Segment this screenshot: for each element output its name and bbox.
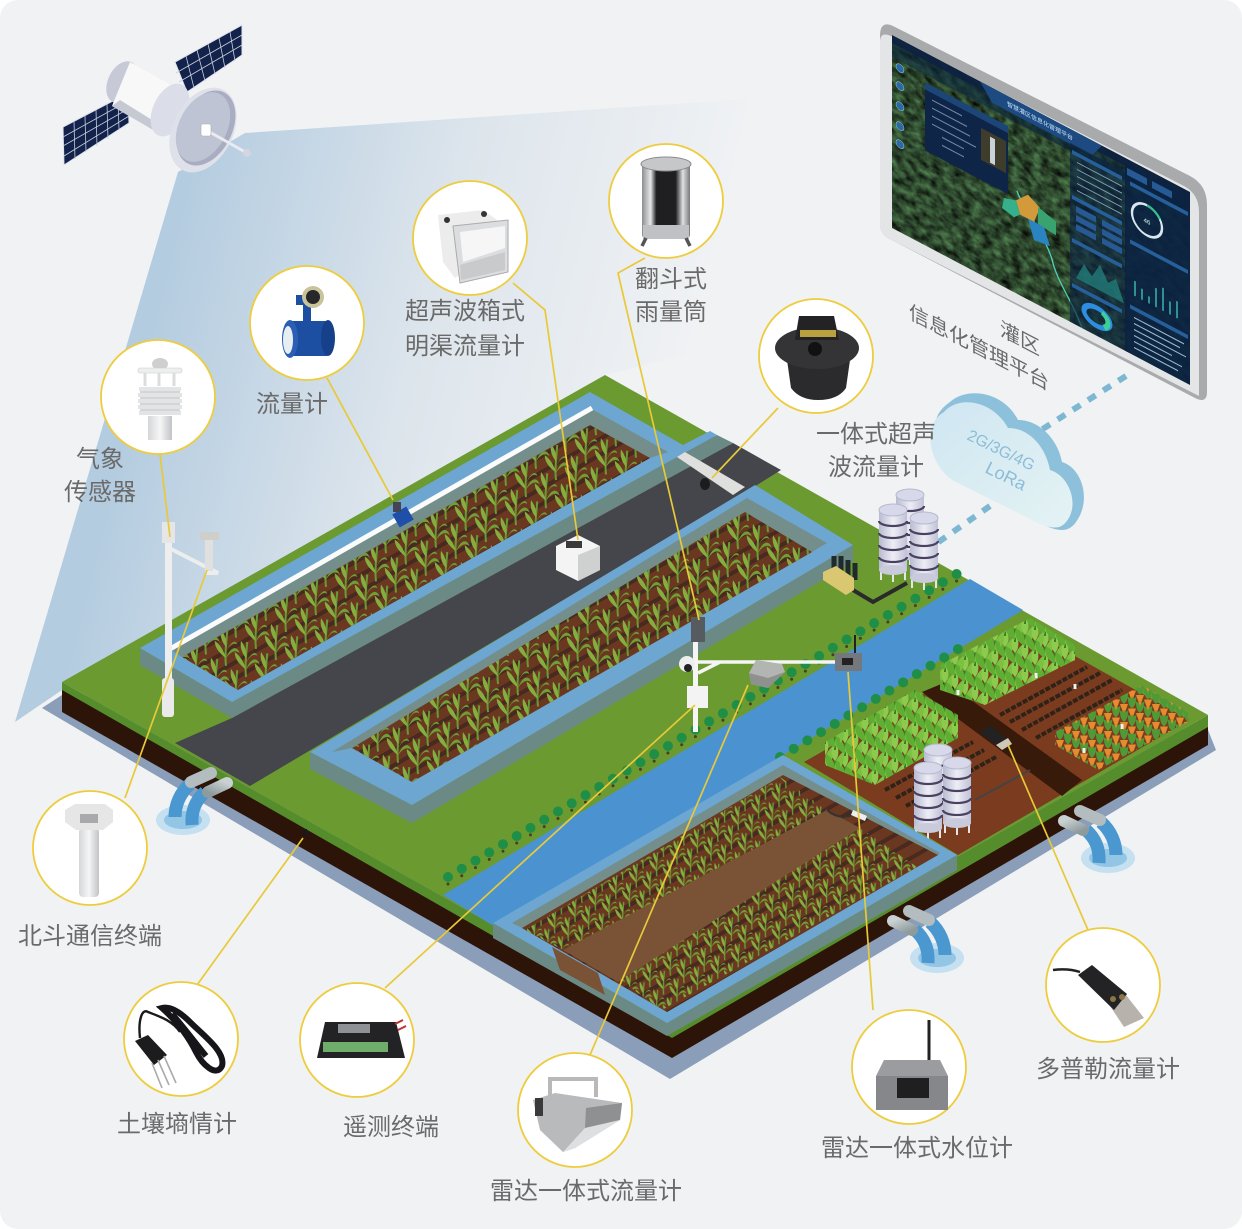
soil moisture probe on board edge xyxy=(303,829,307,836)
callout: weather sensor xyxy=(64,340,215,537)
board shadow xyxy=(42,695,1216,1079)
leader line xyxy=(197,838,303,985)
icon: ultrasonic sensor xyxy=(775,316,859,400)
leader line xyxy=(327,378,393,500)
ring gauge xyxy=(1130,202,1164,239)
leader line xyxy=(513,283,578,540)
label: 波流量计 xyxy=(828,454,924,481)
farm soil xyxy=(804,618,1189,855)
label: 雷达一体式水位计 xyxy=(821,1135,1013,1162)
icon: telemetry terminal xyxy=(317,1020,406,1058)
donut chart xyxy=(1084,301,1110,333)
icon: beidou terminal xyxy=(65,804,113,897)
callout: integrated ultrasonic flow meter xyxy=(712,299,936,481)
box flow meter xyxy=(556,535,600,581)
outfall pipes bottom xyxy=(893,911,964,973)
panel: network cloud xyxy=(930,376,1126,548)
carrot crop xyxy=(1055,685,1188,770)
field 1 soil xyxy=(182,425,650,690)
label: 超声波箱式 xyxy=(405,298,525,325)
right dashboard panels xyxy=(1070,135,1190,385)
icon: radar flow meter xyxy=(533,1079,622,1152)
radar flow meter on station xyxy=(749,660,785,688)
board surface xyxy=(62,375,1208,1022)
field 3 frame xyxy=(493,755,957,1023)
leader line xyxy=(712,408,778,478)
label: 遥测终端 xyxy=(343,1114,439,1141)
inline flow meter xyxy=(393,502,410,521)
left status icons xyxy=(896,62,904,150)
outfall pipes left xyxy=(156,773,227,835)
drip lines right xyxy=(1000,667,1122,738)
board green band xyxy=(62,682,1208,1038)
label: 多普勒流量计 xyxy=(1036,1056,1180,1083)
field 1 xyxy=(140,392,733,718)
meter circle xyxy=(250,266,364,380)
tree row lower bank xyxy=(780,643,968,757)
field 3 upper crops xyxy=(525,777,827,950)
radar water level on station xyxy=(835,635,862,671)
label: 雷达一体式流量计 xyxy=(490,1178,682,1205)
network label: 2G/3G/4G xyxy=(964,427,1037,475)
box meter circle xyxy=(413,181,527,295)
leader line xyxy=(125,570,207,798)
road sensor bridge xyxy=(677,452,745,495)
network label xyxy=(964,427,1037,495)
leader line xyxy=(385,705,695,988)
icon: weather sensor xyxy=(138,358,182,440)
monitor bezel xyxy=(880,24,1207,400)
soil ground xyxy=(804,632,1189,855)
channel sensor and cable xyxy=(827,810,867,821)
panel: information platform monitor xyxy=(880,24,1207,400)
field 1 crops xyxy=(182,425,650,690)
callout: beidou terminal xyxy=(18,570,207,950)
irrigation area map xyxy=(1002,181,1082,328)
map popup xyxy=(925,82,1008,194)
field 3 frame gap xyxy=(552,947,605,995)
monitor screen xyxy=(892,35,1190,385)
road xyxy=(175,443,781,786)
label: 翻斗式 xyxy=(635,266,707,293)
label: 流量计 xyxy=(256,391,328,418)
field 1 wall side xyxy=(140,435,733,718)
callout: radar flow meter xyxy=(490,685,748,1205)
label: 明渠流量计 xyxy=(405,333,525,360)
solar panel right xyxy=(175,25,242,92)
tanks upper xyxy=(879,489,938,590)
panel: farm board xyxy=(42,375,1216,1079)
telemetry circle xyxy=(300,983,414,1097)
area chart xyxy=(1076,264,1124,304)
field 3 inner wall xyxy=(512,765,940,1012)
field 2 soil xyxy=(352,512,812,782)
network label: LoRa xyxy=(982,458,1031,495)
leafy crop right xyxy=(940,618,1075,705)
leader line xyxy=(1008,745,1088,930)
platform title on screen: 智慧灌区信息化管理平台 xyxy=(1007,99,1073,142)
callout: doppler flow meter xyxy=(1008,745,1180,1083)
field 2 crops xyxy=(352,512,812,782)
leader line xyxy=(848,672,873,1010)
irrigation pipe xyxy=(170,408,592,649)
callout: radar water level meter xyxy=(821,672,1013,1162)
progress bars xyxy=(1134,318,1186,375)
cloud shape xyxy=(930,393,1084,530)
field 1 inner wall xyxy=(168,408,668,690)
callout: ultrasonic box flow meter xyxy=(405,181,578,540)
callout: tipping bucket rain gauge xyxy=(609,144,723,620)
label: 传感器 xyxy=(64,479,136,506)
callout: soil moisture meter xyxy=(117,838,303,1138)
satellite dish xyxy=(156,76,251,184)
sensor cable xyxy=(975,770,1030,800)
icon: box flow meter xyxy=(438,210,508,283)
solar panel left xyxy=(63,93,129,165)
field 3 soil xyxy=(522,775,938,1012)
icon: rain gauge xyxy=(641,157,691,246)
terminal circle xyxy=(33,791,147,905)
field 2 xyxy=(310,485,853,823)
field 2 wall side xyxy=(310,545,853,823)
tanks lower xyxy=(914,744,971,840)
field 3 lower crops xyxy=(620,828,917,1010)
leader line xyxy=(590,685,748,1055)
label: 气象 xyxy=(76,446,124,473)
ring gauge: 46 xyxy=(1144,217,1151,227)
ultrasonic circle xyxy=(759,299,873,413)
soil circle xyxy=(124,982,238,1096)
label: 一体式超声 xyxy=(816,421,936,448)
doppler circle xyxy=(1046,928,1160,1042)
callout: telemetry terminal xyxy=(300,705,695,1141)
leader line xyxy=(160,454,170,537)
icon: soil moisture sensor xyxy=(135,1008,222,1088)
weather station pole xyxy=(162,522,219,717)
leader line xyxy=(618,258,699,620)
soil markers xyxy=(958,673,1122,753)
field 3 wall side xyxy=(493,855,957,1036)
radar flow circle xyxy=(518,1053,632,1167)
icon: radar water level meter xyxy=(876,1020,948,1110)
field 2 inner wall xyxy=(332,498,827,782)
satellite body xyxy=(100,56,197,143)
callout: flow meter xyxy=(250,266,393,500)
tree row upper bank xyxy=(448,572,960,884)
dark access track xyxy=(922,682,1082,796)
label: 北斗通信终端 xyxy=(18,923,162,950)
panel: satellite xyxy=(63,25,251,184)
board dark side xyxy=(62,688,1208,1058)
field 3 light soil strip xyxy=(563,810,860,982)
field 1 frame xyxy=(140,392,717,702)
dashed link to tanks xyxy=(930,506,990,548)
satellite signal beam xyxy=(15,90,905,722)
sensor circle xyxy=(101,340,215,454)
platform name label: 灌区 xyxy=(1000,317,1040,360)
water level circle xyxy=(852,1010,966,1124)
outfall pipes right xyxy=(1064,811,1135,873)
generator and pipeline xyxy=(823,556,907,602)
field 3 xyxy=(493,755,957,1036)
gauge circle xyxy=(609,144,723,258)
soil sensor xyxy=(980,725,1012,750)
label: 雨量筒 xyxy=(635,299,707,326)
field 2 frame xyxy=(310,485,853,805)
icon: doppler flow meter xyxy=(1053,965,1144,1027)
label: 土壤墒情计 xyxy=(117,1111,237,1138)
drip lines left xyxy=(885,742,996,806)
river xyxy=(443,579,1023,928)
dashed link to platform xyxy=(1038,376,1126,432)
icon: electromagnetic flow meter xyxy=(282,286,335,358)
platform name label: 信息化管理平台 xyxy=(909,300,1049,395)
leafy crop left xyxy=(825,690,958,785)
bar chart xyxy=(1134,280,1178,319)
monitoring station xyxy=(679,617,838,732)
